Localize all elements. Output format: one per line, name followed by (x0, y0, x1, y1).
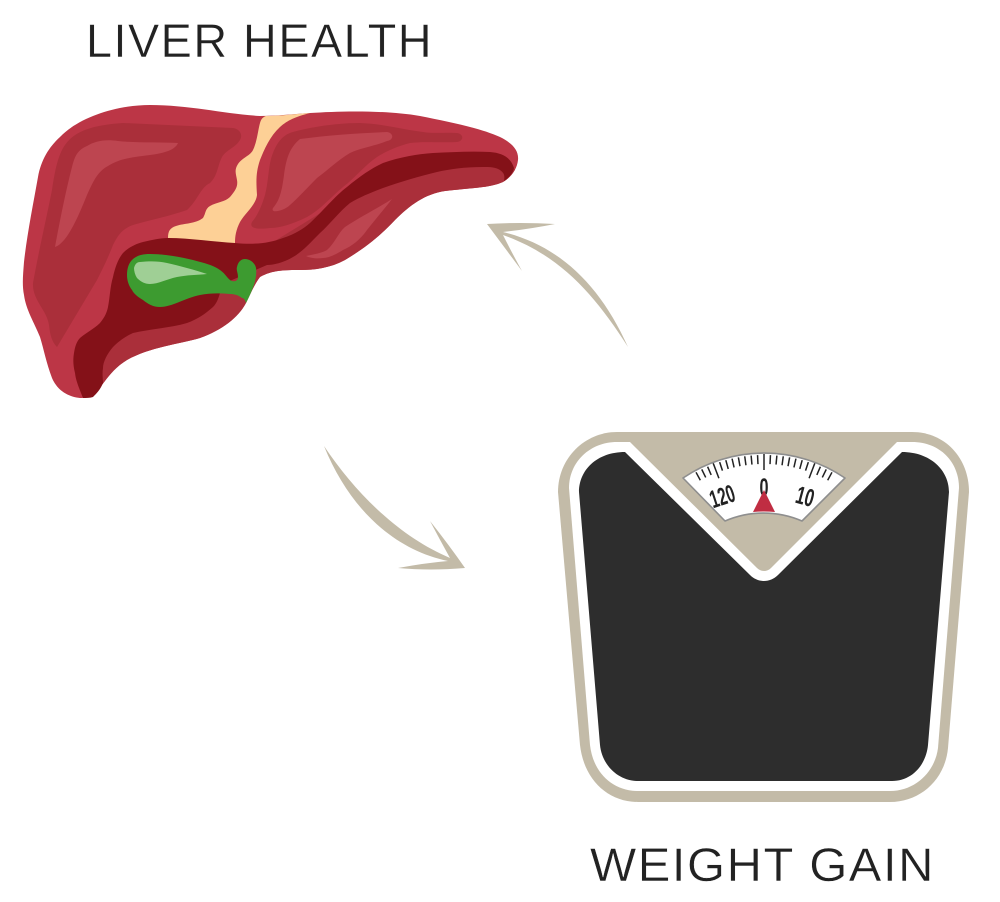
right lobe highlight (273, 132, 392, 211)
scale white border (569, 442, 959, 791)
dial number 0: 0 (760, 474, 768, 502)
title: liver health: LIVER HEALTH (86, 14, 433, 67)
dark vein and lower duct (73, 152, 514, 398)
dial ticks (696, 454, 832, 480)
liver body (23, 105, 518, 398)
arrow: weight gain to liver (487, 223, 628, 347)
icon: bathroom scale (558, 432, 969, 802)
lower band shade (102, 167, 516, 385)
left lobe highlight (55, 140, 178, 247)
dial needle (753, 490, 775, 512)
title: weight gain: WEIGHT GAIN (590, 838, 935, 891)
arrow: liver to weight gain (324, 446, 465, 570)
dial panel (630, 442, 897, 571)
dial number 10: 10 (793, 481, 817, 513)
gallbladder (127, 254, 256, 307)
scale dark platform (579, 452, 949, 781)
left lobe shade (33, 123, 241, 347)
scale outer frame (558, 432, 969, 802)
dial face (683, 453, 845, 521)
gallbladder highlight (134, 261, 207, 284)
cream ligament (168, 113, 310, 243)
lower band highlight (306, 199, 392, 258)
dial number 120: 120 (706, 480, 739, 514)
icon: liver (22, 105, 518, 398)
dial (683, 453, 845, 521)
right lobe shade (251, 123, 462, 229)
